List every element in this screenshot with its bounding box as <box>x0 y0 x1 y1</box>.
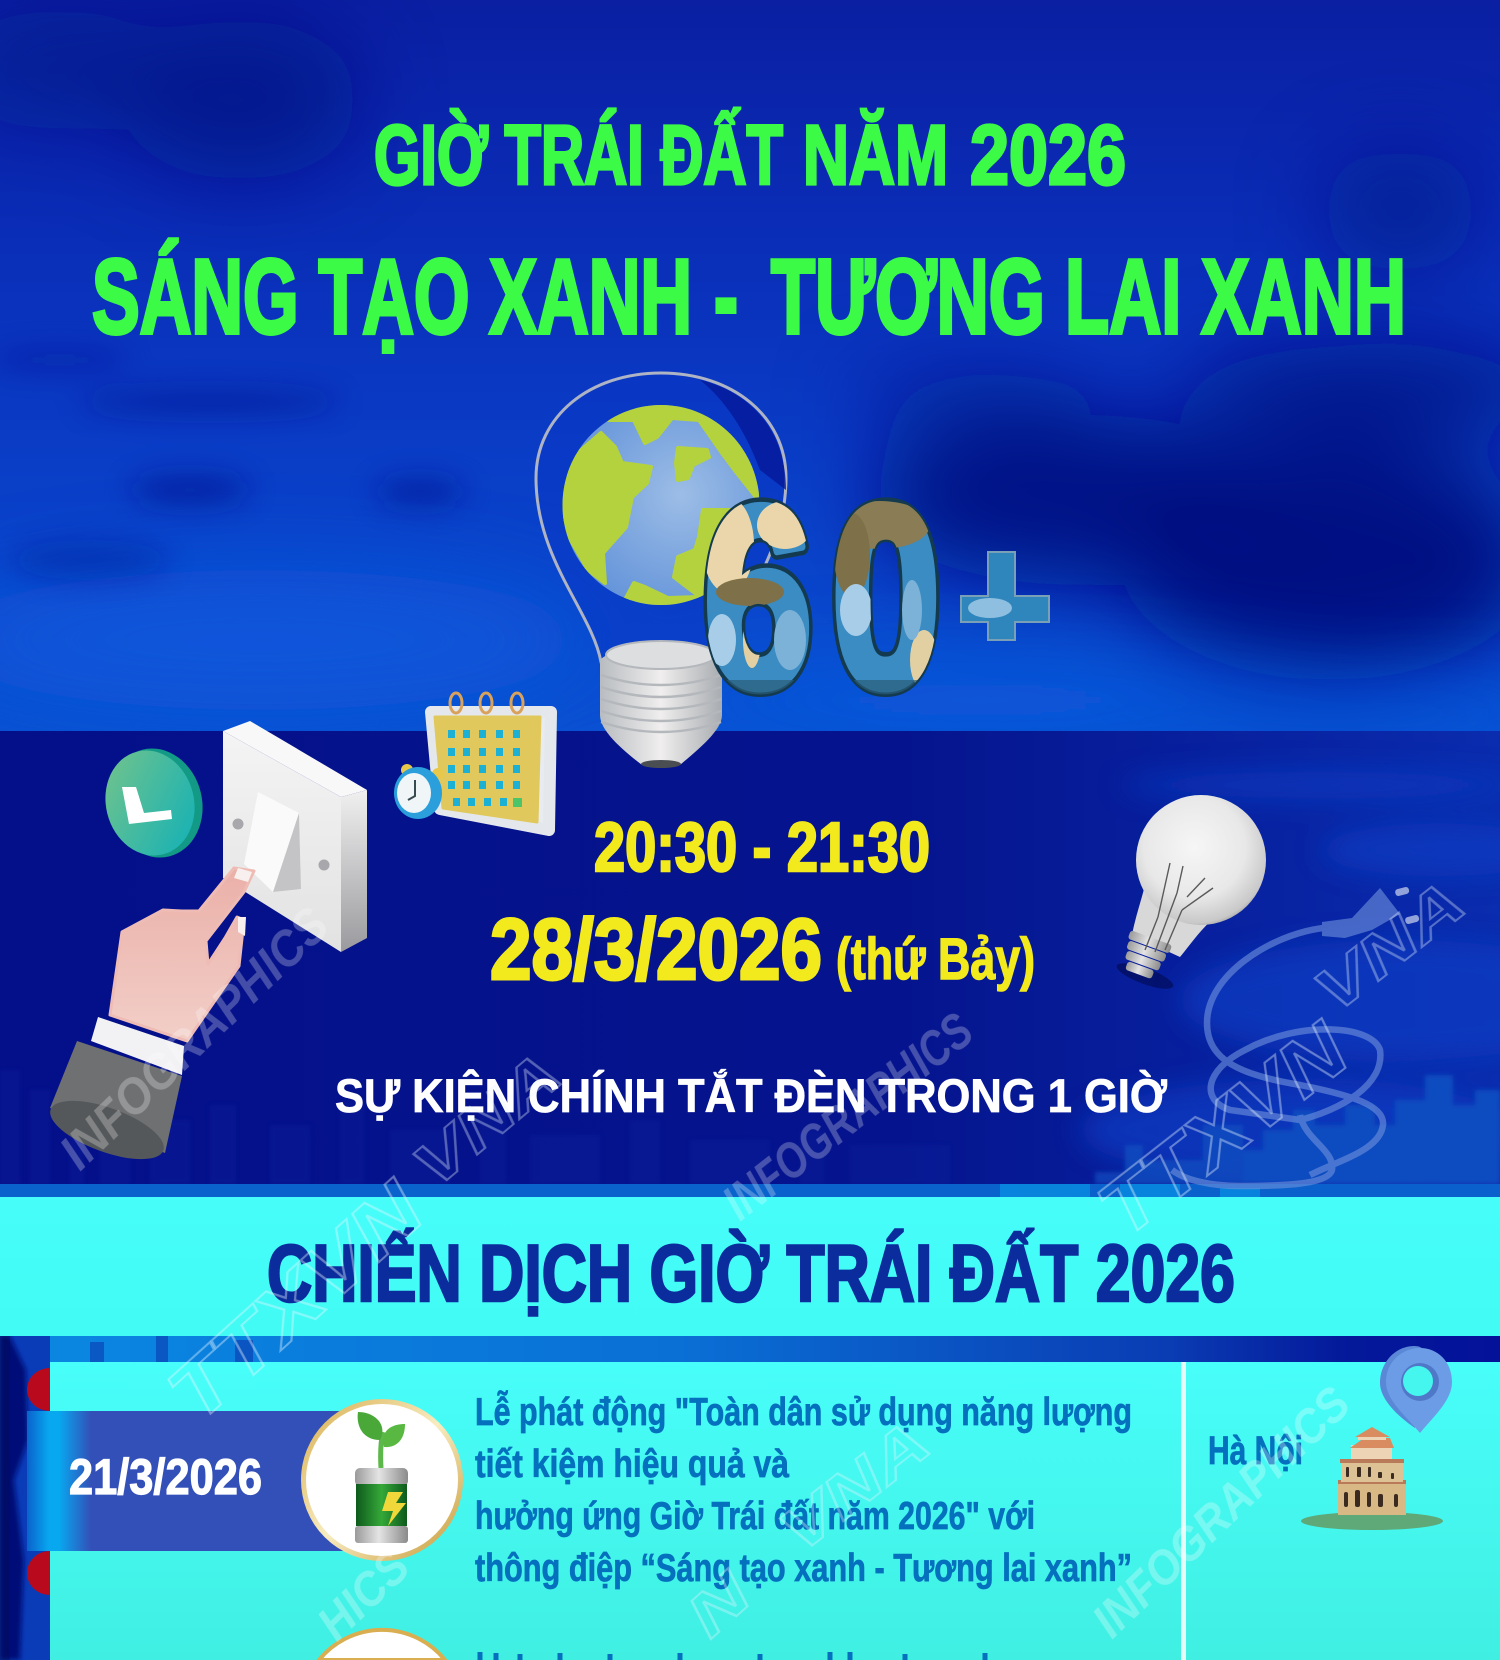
icon: 60+ earth hour logo: 0 <box>831 453 941 741</box>
city skyline silhouette <box>0 1060 1500 1197</box>
activity description <box>475 1390 1132 1590</box>
main event description: SỰ KIỆN CHÍNH TẮT ĐÈN TRONG 1 GIỜ <box>335 1069 1168 1122</box>
icon: light bulb with earth <box>536 373 786 768</box>
icon: map pin <box>1380 1346 1452 1433</box>
activity description: tiết kiệm hiệu quả và <box>475 1443 789 1486</box>
activity description: Lễ phát động "Toàn dân sử dụng năng lượng <box>475 1390 1132 1434</box>
event date: 28/3/2026 <box>490 902 822 998</box>
title: Giờ Trái Đất năm 2026: NĂM <box>803 108 948 202</box>
icon: 60+ earth hour logo: 6 <box>703 453 813 741</box>
icon: plug and cord watermark <box>1172 886 1420 1186</box>
icon: clock badge <box>94 739 214 867</box>
icon: 60+ earth hour logo: 0 <box>831 453 941 741</box>
heading band: campaign title <box>0 1197 1500 1336</box>
background: night sky with clouds <box>0 0 1500 1184</box>
title: Giờ Trái Đất năm 2026: 2026 <box>970 108 1126 202</box>
icon: Turtle Tower on islet <box>1301 1427 1443 1530</box>
watermark: Infographics TTXVN: INFOGRAPHICS <box>712 1002 983 1231</box>
watermark: Infographics TTXVN: HICS <box>308 1540 420 1651</box>
location label: Hà Nội: Hà Nội <box>1208 1429 1303 1473</box>
event date: (thứ Bảy) <box>836 927 1035 992</box>
lower background strip <box>0 1336 1500 1660</box>
timeline entry 21/3/2026 <box>27 1368 347 1595</box>
heading band: campaign title: CHIẾN DỊCH GIỜ TRÁI ĐẤT 2026 <box>267 1228 1235 1319</box>
icon: alarm clock <box>394 764 444 819</box>
divider between activity and location <box>1181 1362 1186 1660</box>
title: Sáng tạo xanh - Tương lai xanh <box>92 238 1406 356</box>
icon: battery with leaves <box>304 1402 460 1558</box>
icon: wall light switch <box>223 721 367 952</box>
tops of next activity text <box>480 1652 985 1660</box>
icon: calendar <box>431 693 551 830</box>
event time: 20:30 - 21:30 <box>594 808 930 886</box>
timeline entry 21/3/2026: 21/3/2026 <box>69 1449 262 1505</box>
watermark: Infographics TTXVN <box>49 868 1477 1651</box>
activity description: hưởng ứng Giờ Trái đất năm 2026" với <box>475 1495 1035 1538</box>
title: Sáng tạo xanh - Tương lai xanh: - <box>714 238 738 356</box>
icon: 60+ earth hour logo <box>704 497 1050 697</box>
panel: timeline card <box>27 1346 1500 1660</box>
watermark: Infographics TTXVN: VNA <box>400 1039 574 1200</box>
icon: 60+ earth hour logo: 6 <box>703 453 813 741</box>
watermark: Infographics TTXVN: VNA <box>767 1408 942 1565</box>
second timeline icon circle <box>319 1630 445 1660</box>
icon: hand pressing switch <box>43 868 254 1171</box>
watermark: Infographics TTXVN: N <box>674 1558 765 1650</box>
icon: unlit bulb <box>1114 795 1266 994</box>
watermark: Infographics TTXVN: TTXVN <box>1081 1004 1365 1253</box>
watermark: Infographics TTXVN: TTXVN <box>150 1163 441 1438</box>
title: Giờ Trái Đất năm 2026: GIỜ TRÁI ĐẤT <box>374 108 783 202</box>
watermark: Infographics TTXVN: INFOGRAPHICS <box>1083 1377 1361 1648</box>
title: Sáng tạo xanh - Tương lai xanh: SÁNG TẠO XANH <box>92 238 692 356</box>
watermark: Infographics TTXVN: INFOGRAPHICS <box>49 896 339 1180</box>
watermark: Infographics TTXVN: VNA <box>1302 868 1477 1025</box>
activity description: thông điệp “Sáng tạo xanh - Tương lai xanh” <box>475 1547 1132 1590</box>
